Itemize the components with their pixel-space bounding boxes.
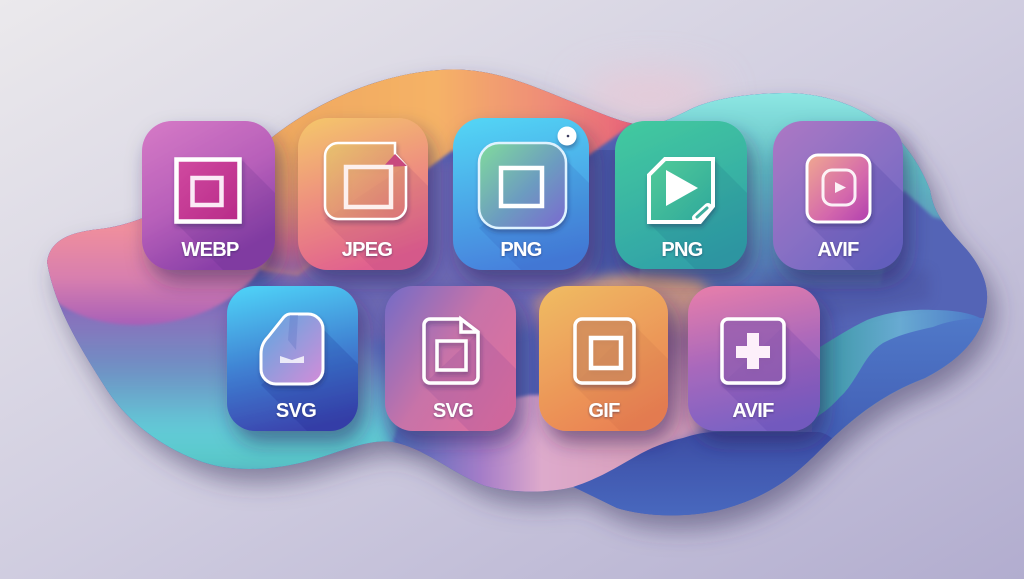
card: PNG	[446, 115, 604, 294]
dark strip below avif card	[764, 272, 926, 314]
label: JPEG	[342, 239, 392, 261]
card: AVIF play	[766, 119, 922, 291]
card: PNG video	[612, 119, 766, 294]
icon: cut corner file	[261, 314, 323, 384]
label: PNG	[661, 239, 703, 261]
lower right wave	[816, 310, 980, 424]
card: WEBP	[134, 119, 295, 296]
lower right blue	[812, 318, 984, 449]
card: AVIF plus	[681, 286, 838, 452]
card: GIF	[532, 285, 687, 457]
lobe lower	[58, 296, 398, 469]
icon: play tile	[807, 155, 870, 222]
label: PNG	[500, 239, 542, 261]
blue purple middle band	[270, 160, 590, 341]
label: AVIF	[817, 239, 859, 261]
icon: rounded image frame	[479, 143, 566, 228]
pink left highlight	[30, 215, 265, 325]
icon: page with fold	[424, 319, 478, 383]
label: WEBP	[181, 239, 239, 261]
label: AVIF	[732, 400, 774, 422]
icon: plus tile	[722, 319, 784, 383]
label: SVG	[433, 400, 473, 422]
card: SVG download	[220, 286, 377, 456]
bottom right blue	[573, 432, 832, 516]
card: SVG page	[378, 286, 536, 456]
icon: nested squares	[176, 160, 240, 222]
dark blue right of the row	[590, 150, 637, 278]
icon: framed square	[575, 319, 634, 383]
bottom centre pink	[392, 392, 660, 492]
tan column	[535, 274, 720, 460]
icon: corner dot	[558, 126, 576, 146]
label: SVG	[276, 400, 316, 422]
label: GIF	[588, 400, 620, 422]
icon: play document	[649, 159, 713, 222]
warm upper layer	[260, 70, 633, 276]
icon: image with folded corner	[325, 143, 407, 219]
warm lower shade	[260, 176, 318, 282]
card: JPEG	[290, 115, 446, 292]
wavy blob backdrop	[10, 60, 1000, 530]
teal upper right layer	[641, 93, 942, 284]
